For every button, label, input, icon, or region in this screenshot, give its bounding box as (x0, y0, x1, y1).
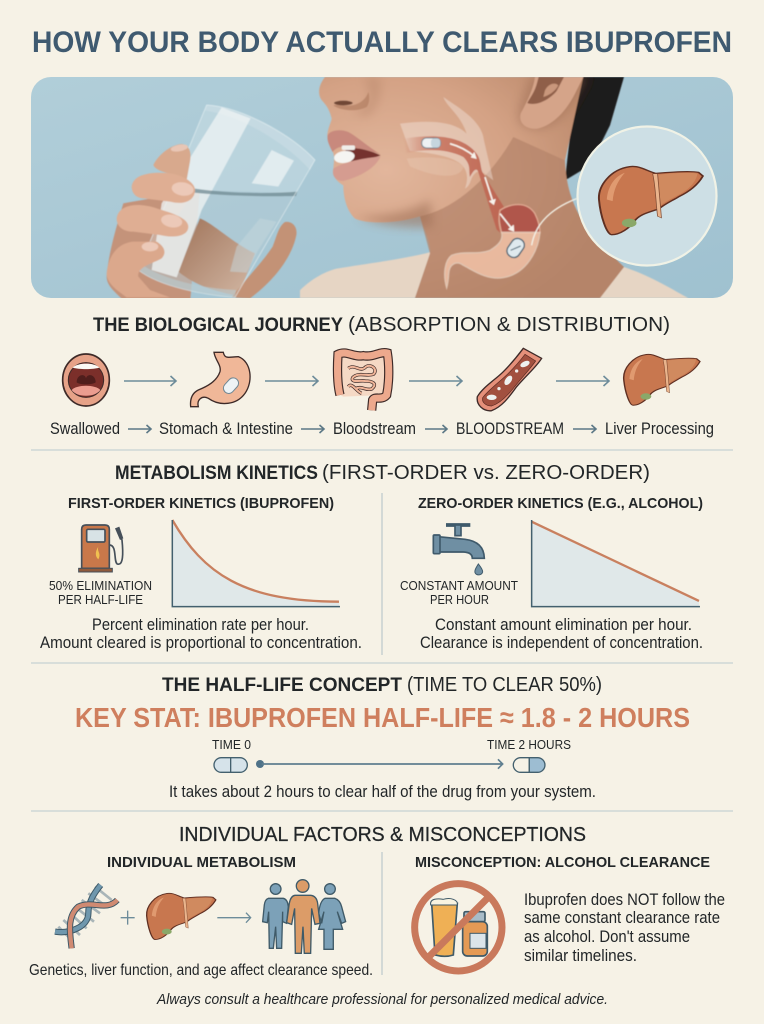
misconception text: Ibuprofen does NOT follow the (524, 891, 725, 909)
digestive tract overlay (400, 97, 577, 288)
description line 2: Amount cleared is proportional to concentration. (40, 634, 362, 652)
hero photo illustration (31, 77, 733, 303)
section: individual factors and misconceptions (29, 824, 725, 979)
section: metabolism kinetics (40, 462, 703, 655)
icon label: 50% ELIMINATION (49, 578, 152, 593)
timeline diagram (214, 758, 545, 772)
heading: factors: INDIVIDUAL FACTORS & MISCONCEPTIONS (179, 824, 586, 846)
description: Constant amount elimination per hour. (435, 616, 692, 634)
footer disclaimer: Always consult a healthcare professional for personalized medical advice. (156, 991, 608, 1008)
chart: first-order curve (172, 520, 340, 607)
misconception text (524, 891, 725, 965)
icon: people (263, 880, 346, 953)
description: Percent elimination rate per hour. (92, 616, 309, 634)
heading: half-life: THE HALF-LIFE CONCEPT (162, 674, 402, 696)
icon: no alcohol and ibuprofen (415, 884, 502, 971)
title: HOW YOUR BODY ACTUALLY CLEARS IBUPROFEN (32, 26, 732, 59)
arrow (217, 913, 251, 923)
icon: half capsule (513, 758, 545, 772)
arrow (409, 376, 462, 386)
misconception text: as alcohol. Don't assume (524, 928, 690, 946)
timeline label end: TIME 2 HOURS (487, 737, 571, 752)
caption: Genetics, liver function, and age affect clearance speed. (29, 962, 373, 979)
journey labels: BLOODSTREAM (456, 420, 564, 438)
section: half-life concept (75, 674, 690, 801)
subheading: misconception: MISCONCEPTION: ALCOHOL CLEARANCE (415, 854, 710, 871)
journey icons (63, 348, 609, 411)
arrow (556, 376, 609, 386)
icon: fuel pump (79, 525, 123, 572)
icon label: CONSTANT AMOUNT (400, 578, 518, 593)
arrow (265, 376, 318, 386)
explanation: It takes about 2 hours to clear half of the drug from your system. (169, 783, 596, 801)
section: biological journey (50, 314, 714, 438)
panel: first-order kinetics (40, 495, 362, 652)
subheading: individual metabolism: INDIVIDUAL METABOLISM (107, 854, 296, 871)
icon label line 2: PER HOUR (430, 592, 489, 607)
heading note: (TIME TO CLEAR 50%) (407, 674, 602, 696)
arrow (124, 376, 176, 386)
journey labels: Swallowed (50, 420, 120, 438)
panel: misconception (415, 854, 725, 971)
heading: metabolism kinetics: METABOLISM KINETICS (115, 462, 318, 484)
heading: biological journey: THE BIOLOGICAL JOURNEY (93, 314, 343, 336)
beer glass (431, 899, 457, 956)
journey labels: Liver Processing (605, 420, 714, 438)
magnifier circle (578, 126, 716, 266)
icon: faucet (433, 525, 484, 575)
icon: mouth (63, 354, 109, 406)
description line 2: Clearance is independent of concentration. (420, 634, 703, 652)
plus sign (121, 911, 135, 925)
icon: full capsule (214, 758, 247, 772)
timeline label start: TIME 0 (212, 737, 251, 752)
panel: individual metabolism (29, 854, 373, 979)
icon: stomach (191, 352, 250, 407)
arrow: time (256, 759, 503, 769)
icon: blood vessel (477, 348, 542, 411)
misconception text: same constant clearance rate (524, 909, 720, 927)
journey labels (50, 420, 714, 438)
hand and glass (107, 105, 315, 303)
icon: DNA helix (55, 885, 117, 948)
icon: liver in magnifier (599, 166, 703, 235)
misconception text: similar timelines. (524, 947, 637, 965)
journey labels: Bloodstream (333, 420, 416, 438)
chart: zero-order line (532, 520, 700, 607)
icon: liver (147, 893, 216, 940)
medicine bottle (463, 912, 487, 956)
icons: DNA, liver, people (55, 880, 346, 953)
icon: liver (624, 354, 700, 405)
key stat: KEY STAT: IBUPROFEN HALF-LIFE ≈ 1.8 - 2 HOURS (75, 702, 690, 733)
panel: zero-order kinetics (400, 495, 703, 652)
heading note: (ABSORPTION & DISTRIBUTION) (348, 314, 670, 336)
prohibition sign (415, 884, 502, 971)
icon label line 2: PER HALF-LIFE (58, 592, 143, 607)
icon: intestines (337, 353, 389, 410)
subheading: zero-order: ZERO-ORDER KINETICS (E.G., ALCOHOL) (418, 495, 703, 512)
heading note: (FIRST-ORDER vs. ZERO-ORDER) (322, 462, 650, 484)
journey labels: Stomach & Intestine (159, 420, 293, 438)
subheading: first-order: FIRST-ORDER KINETICS (IBUPROFEN) (68, 495, 334, 512)
